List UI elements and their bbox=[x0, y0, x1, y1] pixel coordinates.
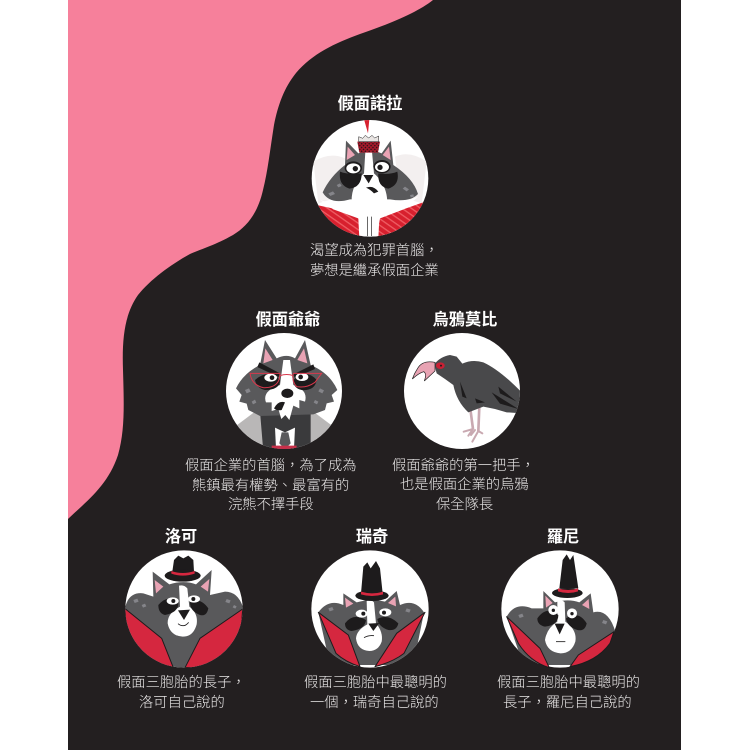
heading: 羅尼 bbox=[547, 528, 579, 546]
character: 假面諾拉 bbox=[310, 94, 439, 279]
description: 假面爺爺的第一把手， bbox=[392, 457, 535, 474]
red cape: right bbox=[570, 632, 614, 667]
description bbox=[304, 674, 447, 711]
heading: 洛可 bbox=[165, 528, 197, 546]
description: 浣熊不擇手段 bbox=[228, 496, 314, 513]
portrait: 瑞奇 bbox=[311, 550, 429, 668]
description: 熊鎮最有權勢、最富有的 bbox=[192, 477, 349, 494]
heading: 假面諾拉 bbox=[338, 94, 402, 113]
red cape: left bbox=[318, 612, 360, 667]
portrait: 洛可 bbox=[125, 550, 243, 672]
description: 渴望成為犯罪首腦， bbox=[310, 242, 439, 259]
character: 洛可 bbox=[117, 528, 246, 711]
character: 假面爺爺 bbox=[185, 311, 357, 513]
description: 也是假面企業的烏鴉 bbox=[400, 476, 529, 493]
description: 洛可自己說的 bbox=[139, 694, 225, 711]
description: 保全隊長 bbox=[436, 496, 493, 513]
description: 假面三胞胎中最聰明的 bbox=[304, 674, 447, 691]
character: 烏鴉莫比 bbox=[392, 310, 535, 513]
description: 夢想是繼承假面企業 bbox=[310, 262, 439, 279]
heading: 瑞奇 bbox=[356, 527, 388, 546]
description: 假面三胞胎中最聰明的 bbox=[497, 674, 640, 691]
description: 假面三胞胎的長子， bbox=[117, 674, 246, 691]
description bbox=[392, 457, 535, 513]
description: 假面企業的首腦，為了成為 bbox=[185, 457, 357, 474]
description bbox=[497, 674, 640, 711]
portrait: 假面爺爺 bbox=[226, 333, 342, 452]
character: 羅尼 bbox=[497, 528, 640, 711]
pink wave bbox=[68, 0, 433, 519]
character: 瑞奇 bbox=[304, 527, 447, 711]
portrait: 羅尼 bbox=[501, 550, 619, 668]
red cape: right bbox=[375, 612, 425, 667]
red cape: left bbox=[507, 617, 549, 668]
heading: 烏鴉莫比 bbox=[433, 310, 497, 329]
portrait: 烏鴉莫比 bbox=[404, 333, 522, 449]
heading: 假面爺爺 bbox=[256, 311, 320, 329]
portrait: 假面諾拉 bbox=[312, 119, 428, 240]
description: 長子，羅尼自己說的 bbox=[503, 694, 632, 711]
description bbox=[117, 674, 246, 711]
description bbox=[185, 457, 357, 513]
description: 一個，瑞奇自己說的 bbox=[310, 694, 439, 711]
description bbox=[310, 242, 439, 279]
